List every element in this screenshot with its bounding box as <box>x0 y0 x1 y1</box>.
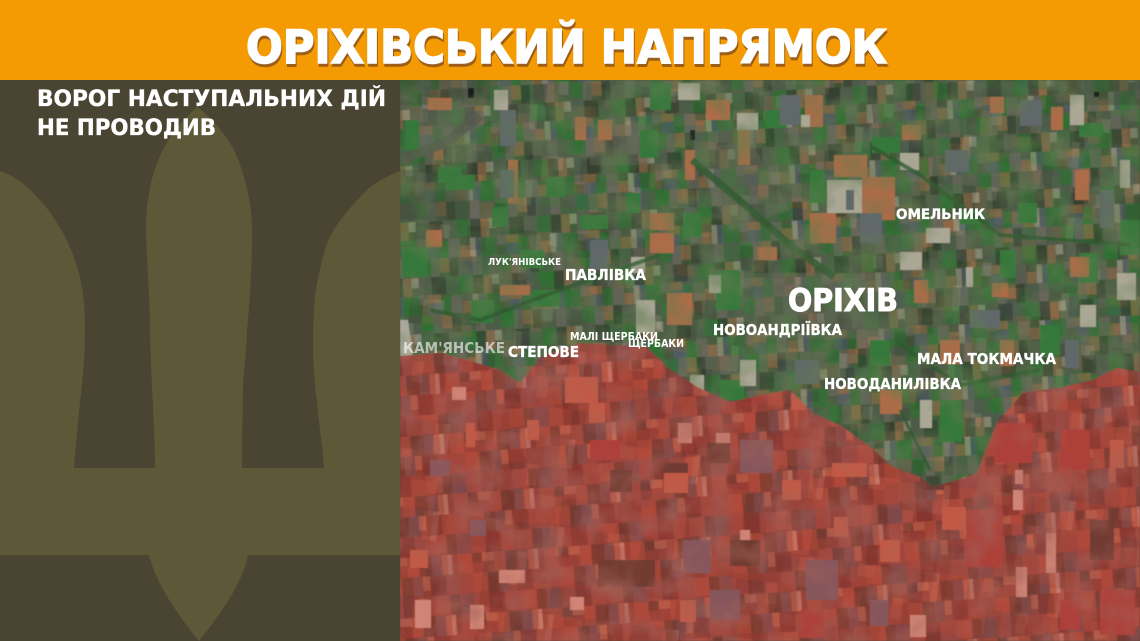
label: Kamianske: КАМ'ЯНСЬКЕ <box>403 339 505 357</box>
label: Pavlivka: ПАВЛІВКА <box>565 266 646 284</box>
red zone: darker blotches <box>400 340 1140 641</box>
red zone: dark fields <box>598 443 1114 587</box>
label: Mala Tokmachka: МАЛА ТОКМАЧКА <box>917 350 1056 368</box>
map: darker blotches <box>400 80 1140 490</box>
title: ОРІХІВСЬКИЙ НАПРЯМОК <box>246 20 887 74</box>
map: dark river lines <box>430 147 1130 470</box>
label: Orikhiv: ОРІХІВ <box>788 283 898 319</box>
title: ОРІХІВСЬКИЙ НАПРЯМОК <box>247 23 888 77</box>
red zone: saturated red fields <box>590 423 1135 638</box>
map labels <box>403 207 1056 393</box>
map: unoccupied farmland <box>400 80 1140 490</box>
header bar <box>0 0 1140 80</box>
label: Novodanylivka: НОВОДАНИЛІВКА <box>824 375 961 393</box>
satellite map <box>400 80 1140 641</box>
map: bright green fields <box>402 83 1140 442</box>
label: Omelnyk: ОМЕЛЬНИК <box>896 207 986 223</box>
status text <box>37 84 386 141</box>
red zone: mauve fields <box>430 440 888 626</box>
map: occupied zone in red <box>400 340 1140 641</box>
status text: ВОРОГ НАСТУПАЛЬНИХ ДІЙ <box>37 84 386 112</box>
map: grey fields <box>500 95 1114 384</box>
status text: НЕ ПРОВОДИВ <box>37 115 216 141</box>
red zone: pink fields <box>415 387 1056 637</box>
map: orange fields <box>426 95 1089 414</box>
red zone: light fields <box>410 377 1124 622</box>
map: pale fields <box>494 83 1136 428</box>
label: Lukianivske: ЛУК'ЯНІВСЬКЕ <box>488 257 561 268</box>
label: Stepove: СТЕПОВЕ <box>508 343 579 361</box>
label: Novoandriivka: НОВОАНДРІЇВКА <box>713 320 842 339</box>
label: Shcherbaky: ЩЕРБАКИ <box>628 337 684 350</box>
trident emblem <box>0 107 400 641</box>
label: Mali Shcherbaky: МАЛІ ЩЕРБАКИ <box>570 330 658 343</box>
left panel <box>0 80 400 641</box>
